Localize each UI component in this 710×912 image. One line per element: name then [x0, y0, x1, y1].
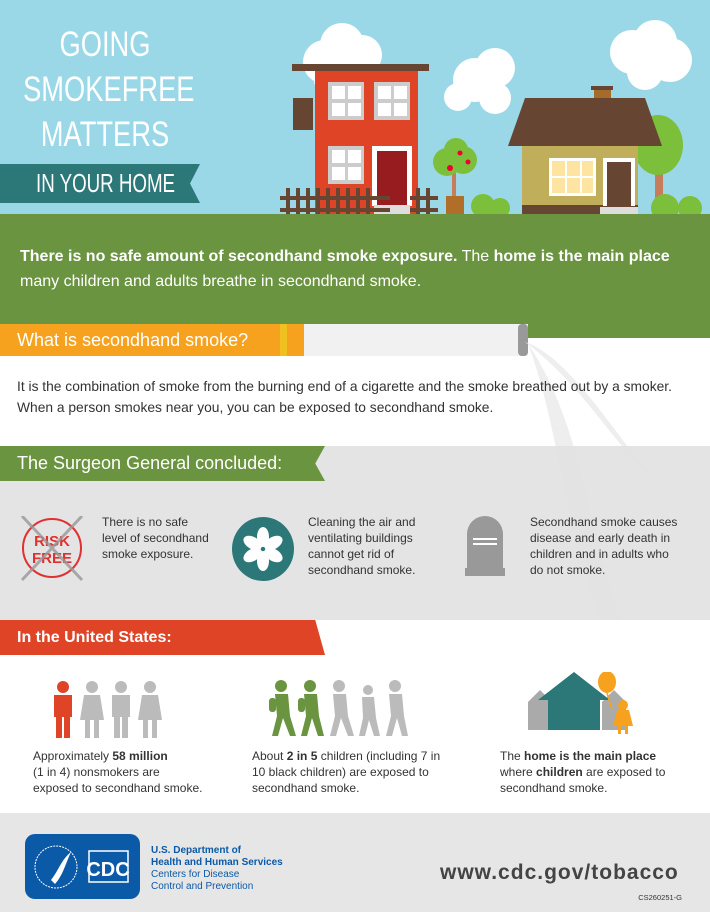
title: SMOKEFREE [23, 70, 195, 109]
icon: home with child [528, 672, 633, 734]
banner: in your home [0, 164, 200, 203]
title: GOING [59, 25, 151, 64]
heading: in the united states: In the United States: [17, 629, 172, 646]
illustration: houses [280, 20, 702, 214]
heading: surgeon general [0, 446, 325, 481]
intro text: There is no safe amount of secondhand smoke exposure. The home is the main place many children and adults breathe in secondhand smoke. [20, 248, 670, 290]
text: About 2 in 5 children (including 7 in 10 black children) are exposed to secondhand smoke. [252, 749, 440, 795]
cigarette [300, 324, 528, 356]
heading: what is secondhand smoke: What is secondhand smoke? [17, 330, 248, 350]
heading: surgeon general: The Surgeon General concluded: [17, 453, 282, 473]
footer [0, 813, 710, 912]
banner: in your home: IN YOUR HOME [36, 168, 175, 198]
text: (1 in 4) nonsmokers are exposed to secondhand smoke. [33, 765, 202, 795]
agency name [151, 845, 283, 892]
item: fan [232, 515, 415, 581]
text: There is no safe level of secondhand smoke exposure. [102, 515, 209, 561]
heading: in the united states [0, 620, 325, 655]
logo: hhs cdc: CDC [86, 859, 130, 881]
stat: children [252, 680, 440, 795]
code: CS260251-G [638, 893, 682, 902]
header scene [0, 0, 710, 216]
agency name: U.S. Department of [151, 845, 241, 856]
icon: four people [54, 681, 162, 738]
url: www.cdc.gov/tobacco [440, 861, 679, 884]
icon: children walking [269, 680, 408, 736]
title: MATTERS [41, 115, 169, 154]
heading: what is secondhand smoke [0, 324, 304, 356]
smoke [525, 342, 627, 446]
text: The home is the main place where children are exposed to secondhand smoke. [500, 749, 665, 795]
title [23, 25, 195, 154]
icon: risk free: RISK [34, 533, 70, 550]
item: risk free [21, 515, 209, 581]
agency name: Control and Prevention [151, 881, 253, 892]
agency name: Health and Human Services [151, 857, 283, 868]
icon: tombstone [465, 516, 505, 576]
definition text: It is the combination of smoke from the burning end of a cigarette and the smoke breathed out by a smoker. When a person smokes near you, you can be exposed to secondhand smoke. [17, 379, 672, 415]
icon: risk free: FREE [32, 550, 72, 567]
icon: fan [232, 517, 294, 581]
white section [0, 338, 710, 446]
icon: risk free [21, 516, 83, 581]
item: tombstone [465, 515, 677, 577]
text: Cleaning the air and ventilating buildings cannot get rid of secondhand smoke. [308, 515, 415, 577]
logo: hhs cdc [25, 834, 140, 899]
stat: adults [33, 681, 202, 795]
text [33, 749, 202, 795]
stat: home [500, 672, 665, 795]
agency name: Centers for Disease [151, 869, 239, 880]
text: Secondhand smoke causes disease and early death in children and in adults who do not smoke. [530, 515, 677, 577]
text: Approximately 58 million [33, 749, 168, 763]
intro band [0, 214, 710, 338]
gray section: surgeon general [0, 446, 710, 620]
